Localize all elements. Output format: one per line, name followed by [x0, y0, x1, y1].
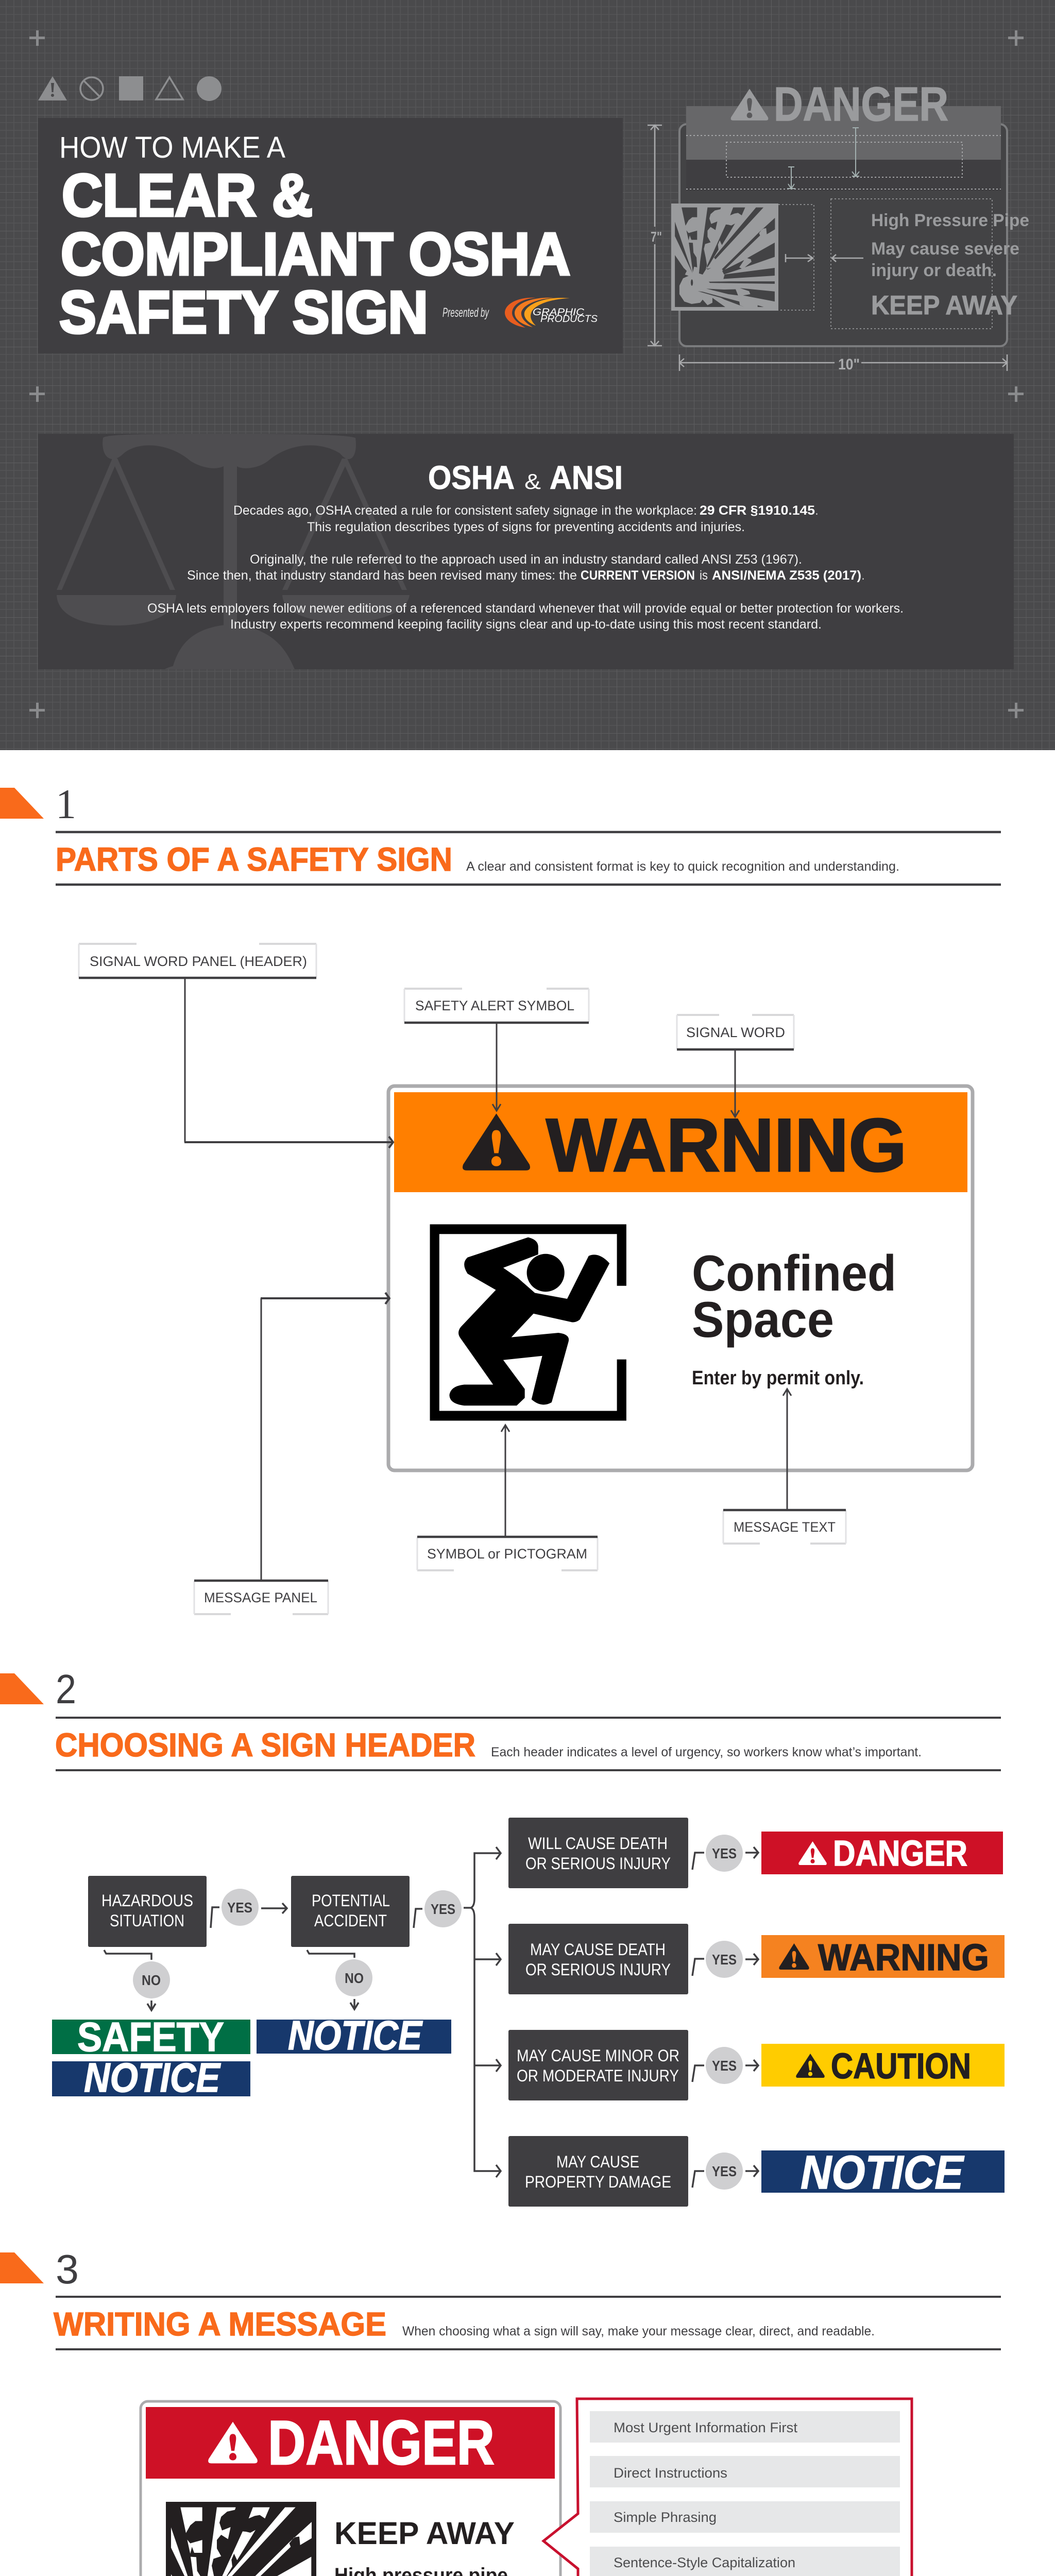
blueprint message text: injury or death.: [871, 261, 997, 280]
pictogram: confined space: [430, 1224, 626, 1420]
ghost icon: scales: [57, 434, 410, 669]
intro text: Originally, the rule referred to the approach used in an industry standard called ANSI Z53 (1967).: [250, 552, 802, 567]
blueprint message text: [871, 211, 1029, 320]
header shape icons: [38, 76, 222, 101]
section 3: heading block: [0, 2246, 1001, 2349]
checklist item: [590, 2456, 900, 2487]
decision: may cause death: MAY CAUSE DEATH: [530, 1940, 666, 1959]
yes bubble: [424, 1890, 462, 1927]
blueprint sign diagram: 7": [651, 229, 662, 245]
title kicker: HOW TO MAKE A: [59, 131, 285, 164]
presented by: Presented by: [443, 306, 489, 320]
decision: property damage: [508, 2136, 688, 2207]
callout: message text: MESSAGE TEXT: [734, 1519, 836, 1535]
blueprint sign diagram: [648, 77, 1029, 373]
section 1: heading block: [0, 781, 1001, 885]
title line one: CLEAR &: [62, 162, 313, 229]
callout: signal word panel: [79, 944, 393, 1148]
header: notice: NOTICE: [801, 2146, 964, 2199]
title line three: SAFETY SIGN: [59, 279, 428, 346]
section heading: PARTS OF A SAFETY SIGN: [56, 841, 452, 878]
blueprint message text: May cause severe: [871, 239, 1019, 259]
checklist item: [590, 2411, 900, 2443]
decision: may cause minor: MAY CAUSE MINOR OR: [517, 2046, 679, 2065]
yes bubble: [706, 2047, 743, 2084]
intro text: OSHA lets employers follow newer editions of a referenced standard whenever that will provide equal or better protection for workers.: [147, 601, 904, 616]
yes bubble: [706, 1835, 743, 1872]
decision: will cause death: WILL CAUSE DEATH: [528, 1834, 668, 1853]
intro text: Since then, that industry standard has been revised many times: the: [187, 568, 577, 583]
decision: may cause minor: OR MODERATE INJURY: [517, 2066, 679, 2085]
decision: property damage: PROPERTY DAMAGE: [525, 2173, 671, 2191]
callout: signal word: SIGNAL WORD: [686, 1025, 785, 1040]
yes bubble: YES: [431, 1901, 455, 1917]
intro text: ANSI/NEMA Z535 (2017): [712, 568, 861, 583]
intro text: CURRENT VERSION: [581, 568, 695, 583]
blueprint sign diagram: 10": [838, 356, 860, 373]
logo: Graphic Products: GRAPHIC: [533, 307, 584, 318]
yes bubble: [222, 1889, 259, 1926]
decision: will cause death: OR SERIOUS INJURY: [525, 1854, 671, 1873]
sign message: Confined: [692, 1245, 896, 1301]
blueprint danger header: DANGER: [774, 77, 948, 131]
callout: message panel: [194, 1293, 389, 1614]
section number: 3: [56, 2246, 79, 2292]
callout: symbol or pictogram: [417, 1425, 598, 1570]
decision: may cause death: OR SERIOUS INJURY: [525, 1960, 671, 1979]
decision: hazardous situation: HAZARDOUS: [101, 1891, 193, 1910]
decision: property damage: MAY CAUSE: [556, 2153, 639, 2171]
header: caution: [761, 2044, 1005, 2087]
decision: will cause death: [508, 1818, 688, 1888]
decision: hazardous situation: SITUATION: [110, 1911, 184, 1930]
no bubble: [133, 1961, 170, 1998]
callout: signal word: [677, 1015, 794, 1117]
section subtitle: When choosing what a sign will say, make your message clear, direct, and readable.: [402, 2324, 875, 2338]
header: danger: DANGER: [833, 1833, 967, 1873]
flow connectors: [104, 1847, 758, 2188]
section marker: [0, 788, 44, 819]
corner registration crosses: [29, 30, 1024, 718]
intro text: .: [862, 568, 864, 583]
callout: safety alert symbol: SAFETY ALERT SYMBOL: [415, 998, 574, 1013]
sign header: warning: [394, 1092, 967, 1192]
yes bubble: [706, 1941, 743, 1978]
callout: message panel: MESSAGE PANEL: [204, 1590, 317, 1605]
yes bubble: [706, 2153, 743, 2190]
title panel: [38, 118, 623, 353]
section heading: WRITING A MESSAGE: [54, 2306, 386, 2343]
header: danger: [761, 1832, 1003, 1874]
decision: hazardous situation: [88, 1876, 207, 1947]
panel: message checklist: [543, 2399, 912, 2576]
decision: potential accident: [291, 1876, 410, 1947]
header: notice: NOTICE: [84, 2055, 221, 2100]
callout: symbol or pictogram: SYMBOL or PICTOGRAM: [427, 1546, 587, 1562]
callout: safety alert symbol: [404, 989, 589, 1111]
section 2: heading block: [0, 1666, 1001, 1770]
section number: 2: [56, 1666, 76, 1712]
sign header: danger: [146, 2407, 555, 2479]
title line two: COMPLIANT OSHA: [61, 221, 570, 287]
decision: potential accident: ACCIDENT: [314, 1911, 387, 1930]
yes bubble: YES: [227, 1900, 252, 1916]
sign message: KEEP AWAY: [334, 2516, 515, 2551]
section marker: [0, 1673, 44, 1704]
no bubble: NO: [142, 1972, 161, 1988]
header: notice: NOTICE: [288, 2012, 423, 2058]
blueprint danger header: [731, 77, 948, 131]
heading: OSHA & ANSI: [428, 459, 623, 496]
intro text: Decades ago, OSHA created a rule for consistent safety signage in the workplace:: [233, 503, 697, 518]
yes bubble: YES: [712, 2163, 737, 2179]
checklist item: [590, 2501, 900, 2533]
no bubble: [335, 1959, 372, 1996]
decision: potential accident: POTENTIAL: [312, 1891, 390, 1910]
checklist item: Direct Instructions: [614, 2465, 727, 2481]
intro text: is: [700, 568, 708, 583]
heading: OSHA & ANSI: ANSI: [550, 459, 623, 496]
checklist item: Most Urgent Information First: [614, 2420, 798, 2435]
intro text: 29 CFR §1910.145: [700, 503, 815, 518]
section subtitle: Each header indicates a level of urgency, so workers know what’s important.: [491, 1745, 922, 1759]
heading: OSHA & ANSI: OSHA: [428, 459, 515, 496]
no bubble: NO: [345, 1970, 364, 1986]
section number: 1: [56, 781, 76, 827]
intro text: .: [815, 503, 818, 518]
yes bubble: YES: [712, 1845, 737, 1861]
sign header: danger: DANGER: [268, 2408, 495, 2478]
example danger sign: [141, 2401, 560, 2576]
blueprint message text: High Pressure Pipe: [871, 211, 1029, 230]
blueprint message text: KEEP AWAY: [871, 291, 1017, 320]
decision: may cause death: [508, 1924, 688, 1994]
yes bubble: YES: [712, 2058, 737, 2074]
heading: OSHA & ANSI: &: [524, 469, 541, 494]
yes bubble: YES: [712, 1952, 737, 1968]
section marker: [0, 2252, 44, 2283]
decision: may cause minor: [508, 2030, 688, 2100]
logo: Graphic Products: [505, 298, 598, 328]
callout: message text: [723, 1389, 846, 1544]
header background: [0, 0, 1055, 750]
sign message: [692, 1245, 896, 1389]
sign message: Space: [692, 1291, 834, 1348]
section subtitle: A clear and consistent format is key to quick recognition and understanding.: [466, 859, 899, 874]
callout: signal word panel: SIGNAL WORD PANEL (HEADER): [90, 954, 307, 969]
flowchart: [52, 1818, 1005, 2207]
intro text: [147, 503, 904, 632]
panel: OSHA and ANSI: [38, 434, 1014, 669]
header: caution: CAUTION: [831, 2046, 971, 2086]
header: safety: SAFETY: [77, 2014, 224, 2060]
blueprint dimensions: [648, 125, 1007, 371]
example warning sign: [388, 1086, 973, 1470]
sign message: [334, 2516, 515, 2576]
sign header: warning: WARNING: [546, 1103, 907, 1187]
checklist item: [590, 2547, 900, 2576]
sign message: Enter by permit only.: [692, 1367, 864, 1389]
blueprint hazard symbol: [671, 204, 778, 311]
checklist item: Simple Phrasing: [614, 2510, 717, 2525]
intro text: This regulation describes types of signs for preventing accidents and injuries.: [307, 520, 745, 534]
section heading: CHOOSING A SIGN HEADER: [55, 1726, 475, 1764]
pictogram: explosion: [166, 2502, 316, 2576]
header: warning: WARNING: [818, 1937, 989, 1978]
logo: Graphic Products: PRODUCTS: [540, 314, 598, 325]
intro text: Industry experts recommend keeping facility signs clear and up-to-date using this most recent standard.: [230, 617, 822, 632]
checklist item: Sentence-Style Capitalization: [614, 2555, 795, 2570]
